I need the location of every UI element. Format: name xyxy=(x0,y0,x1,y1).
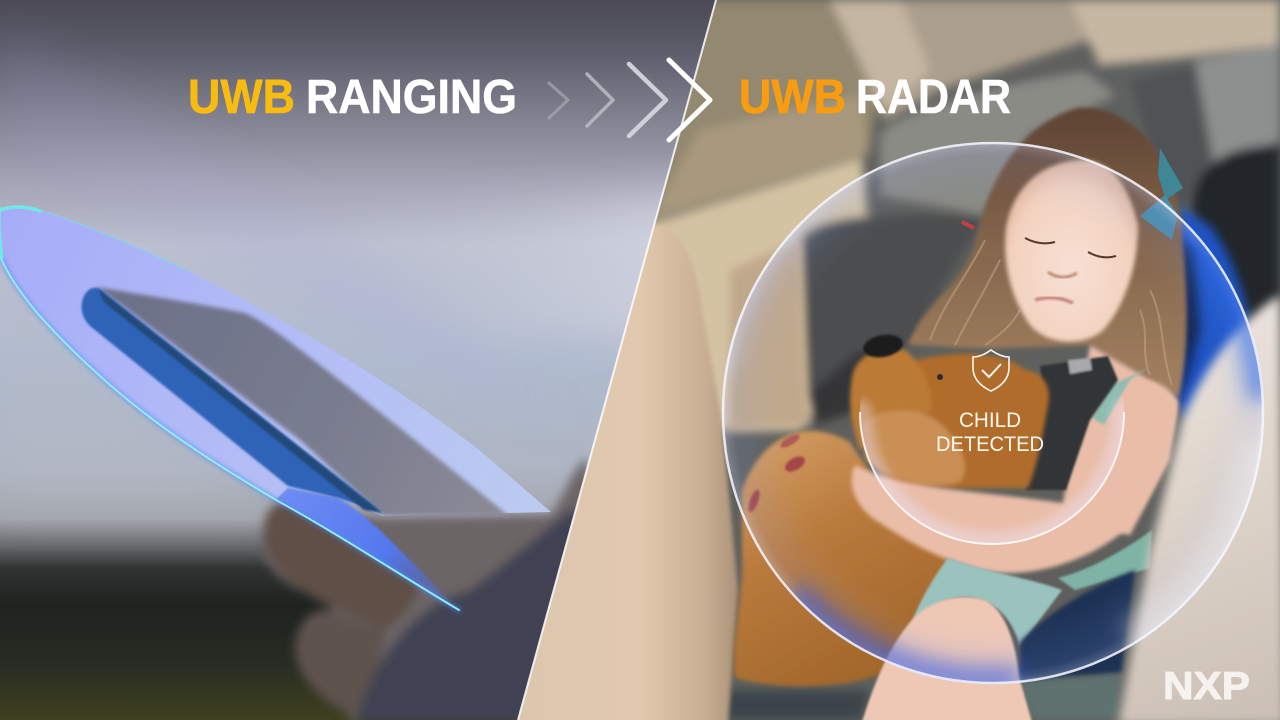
door panel foreground xyxy=(512,225,738,720)
callout: child detected: DETECTED xyxy=(936,433,1044,456)
disc glowing rim xyxy=(0,207,459,610)
logo: NXP: NXP xyxy=(1163,665,1250,708)
title: UWB radar xyxy=(739,71,1011,124)
nose shadow and mouth xyxy=(1048,272,1077,277)
title: UWB radar: UWB xyxy=(739,71,846,124)
phone xyxy=(82,287,509,516)
title: UWB ranging: UWB xyxy=(188,71,295,124)
title: UWB ranging: RANGING xyxy=(306,71,517,124)
UWB disc xyxy=(0,206,551,516)
seat bolster inside circle xyxy=(730,240,810,430)
child's face xyxy=(1005,160,1138,342)
blue seat wing xyxy=(1176,205,1251,425)
icon: shield with check xyxy=(973,350,1009,391)
body skin behind strap xyxy=(1060,345,1178,535)
divider line between panels xyxy=(518,0,716,720)
closed eyes xyxy=(1025,238,1116,257)
child's leg xyxy=(862,597,1032,720)
small red seat belt tab xyxy=(962,222,974,228)
thumb blue glow xyxy=(276,488,455,610)
arrows: progression chevrons xyxy=(549,60,710,140)
hair strands xyxy=(930,240,1172,385)
panel: UWB ranging phone photo xyxy=(0,0,720,720)
callout: child detected: CHILD xyxy=(959,409,1021,432)
dress top xyxy=(1092,368,1148,425)
right foreground seat xyxy=(1118,295,1280,720)
child's arm xyxy=(852,378,1177,573)
shoulder strap xyxy=(1025,356,1118,490)
callout: child detected xyxy=(936,409,1044,456)
teddy bear xyxy=(734,349,1049,686)
lower seat xyxy=(1020,570,1135,680)
light background haze xyxy=(2,46,665,340)
hair xyxy=(908,108,1186,398)
radar detection large circle xyxy=(722,142,1264,685)
dress lower xyxy=(912,530,1152,646)
radar detection inner circle xyxy=(860,412,1124,544)
bear nose, eye and paw pads xyxy=(746,332,943,514)
panel: UWB radar car interior photo xyxy=(500,0,1280,720)
title: UWB ranging xyxy=(188,71,517,124)
title: UWB radar: RADAR xyxy=(856,71,1011,124)
hair bow xyxy=(1140,148,1183,240)
hand and sleeve xyxy=(262,458,600,720)
